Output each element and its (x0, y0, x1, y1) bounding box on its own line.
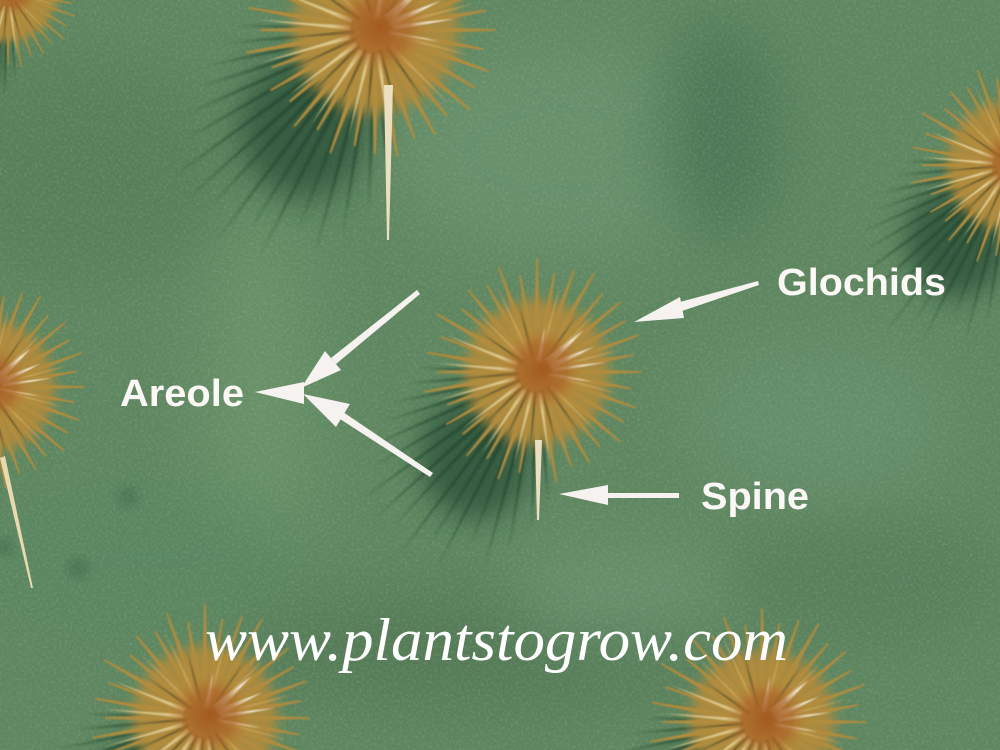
areole: top centre (174, 0, 496, 256)
areole: bottom left (30, 604, 310, 750)
areole: left edge (0, 282, 84, 568)
arrow: areole lower (303, 394, 433, 477)
label: Spine: Spine (701, 476, 809, 518)
spine: central areole (535, 440, 542, 520)
areole: bottom right (587, 608, 867, 750)
spine: left areole (0, 456, 33, 588)
areole: central labelled (362, 258, 642, 569)
areole: right edge (854, 62, 1000, 342)
label: Glochids: Glochids (777, 262, 946, 304)
arrow: glochids (634, 281, 759, 322)
watermark: website address: www.plantstogrow.com (205, 607, 788, 673)
areole: top left corner (0, 0, 79, 126)
spine: top areole (384, 85, 393, 240)
arrow: areole pointer (255, 382, 304, 404)
arrow: areole upper (301, 290, 420, 388)
label: Areole: Areole (120, 373, 244, 415)
arrow: spine (559, 485, 679, 505)
